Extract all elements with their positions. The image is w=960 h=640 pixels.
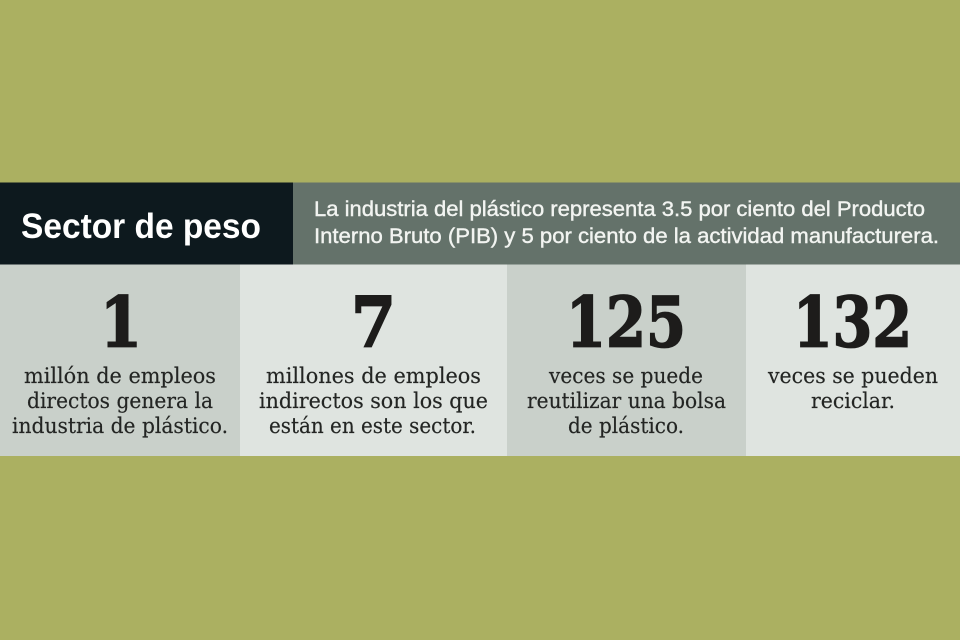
panel: 1 millón de empleos: [0, 264, 240, 456]
number: 1: 1: [100, 282, 142, 364]
text: empleos indirectos: indirectos son los que: [259, 389, 488, 413]
header: description panel: [293, 182, 960, 264]
text: reutilizar bolsa: de plástico.: [568, 414, 684, 438]
text: reutilizar bolsa: [527, 364, 726, 438]
title: Sector de peso: [21, 207, 261, 246]
header: title panel: [0, 182, 293, 264]
description text: Interno Bruto (PIB) y 5 por ciento de la actividad manufacturera.: [314, 224, 939, 248]
text: reciclar: veces se pueden: [767, 364, 938, 388]
text: reutilizar bolsa: reutilizar una bolsa: [527, 389, 726, 413]
number: 125: 125: [566, 282, 686, 364]
description text: La industria del plástico representa 3.5 por ciento del Producto: [314, 197, 925, 221]
number: 132: 132: [793, 282, 912, 364]
panel: 132 veces: [746, 264, 960, 456]
text: reciclar: [767, 364, 938, 413]
text: empleos indirectos: están en este sector.: [269, 414, 476, 438]
text: empleos directos: millón de empleos: [24, 364, 216, 388]
number: 7: 7: [351, 282, 396, 364]
text: reciclar: reciclar.: [811, 389, 895, 413]
text: empleos directos: directos genera la: [27, 389, 213, 413]
text: empleos indirectos: [259, 364, 488, 438]
panel: 125 veces: [507, 264, 746, 456]
text: empleos indirectos: millones de empleos: [266, 364, 481, 388]
text: reutilizar bolsa: veces se puede: [548, 364, 703, 388]
text: empleos directos: industria de plástico.: [12, 414, 228, 438]
description text: [314, 197, 939, 248]
panel: 7 millones de empleos: [240, 264, 507, 456]
text: empleos directos: [12, 364, 228, 438]
